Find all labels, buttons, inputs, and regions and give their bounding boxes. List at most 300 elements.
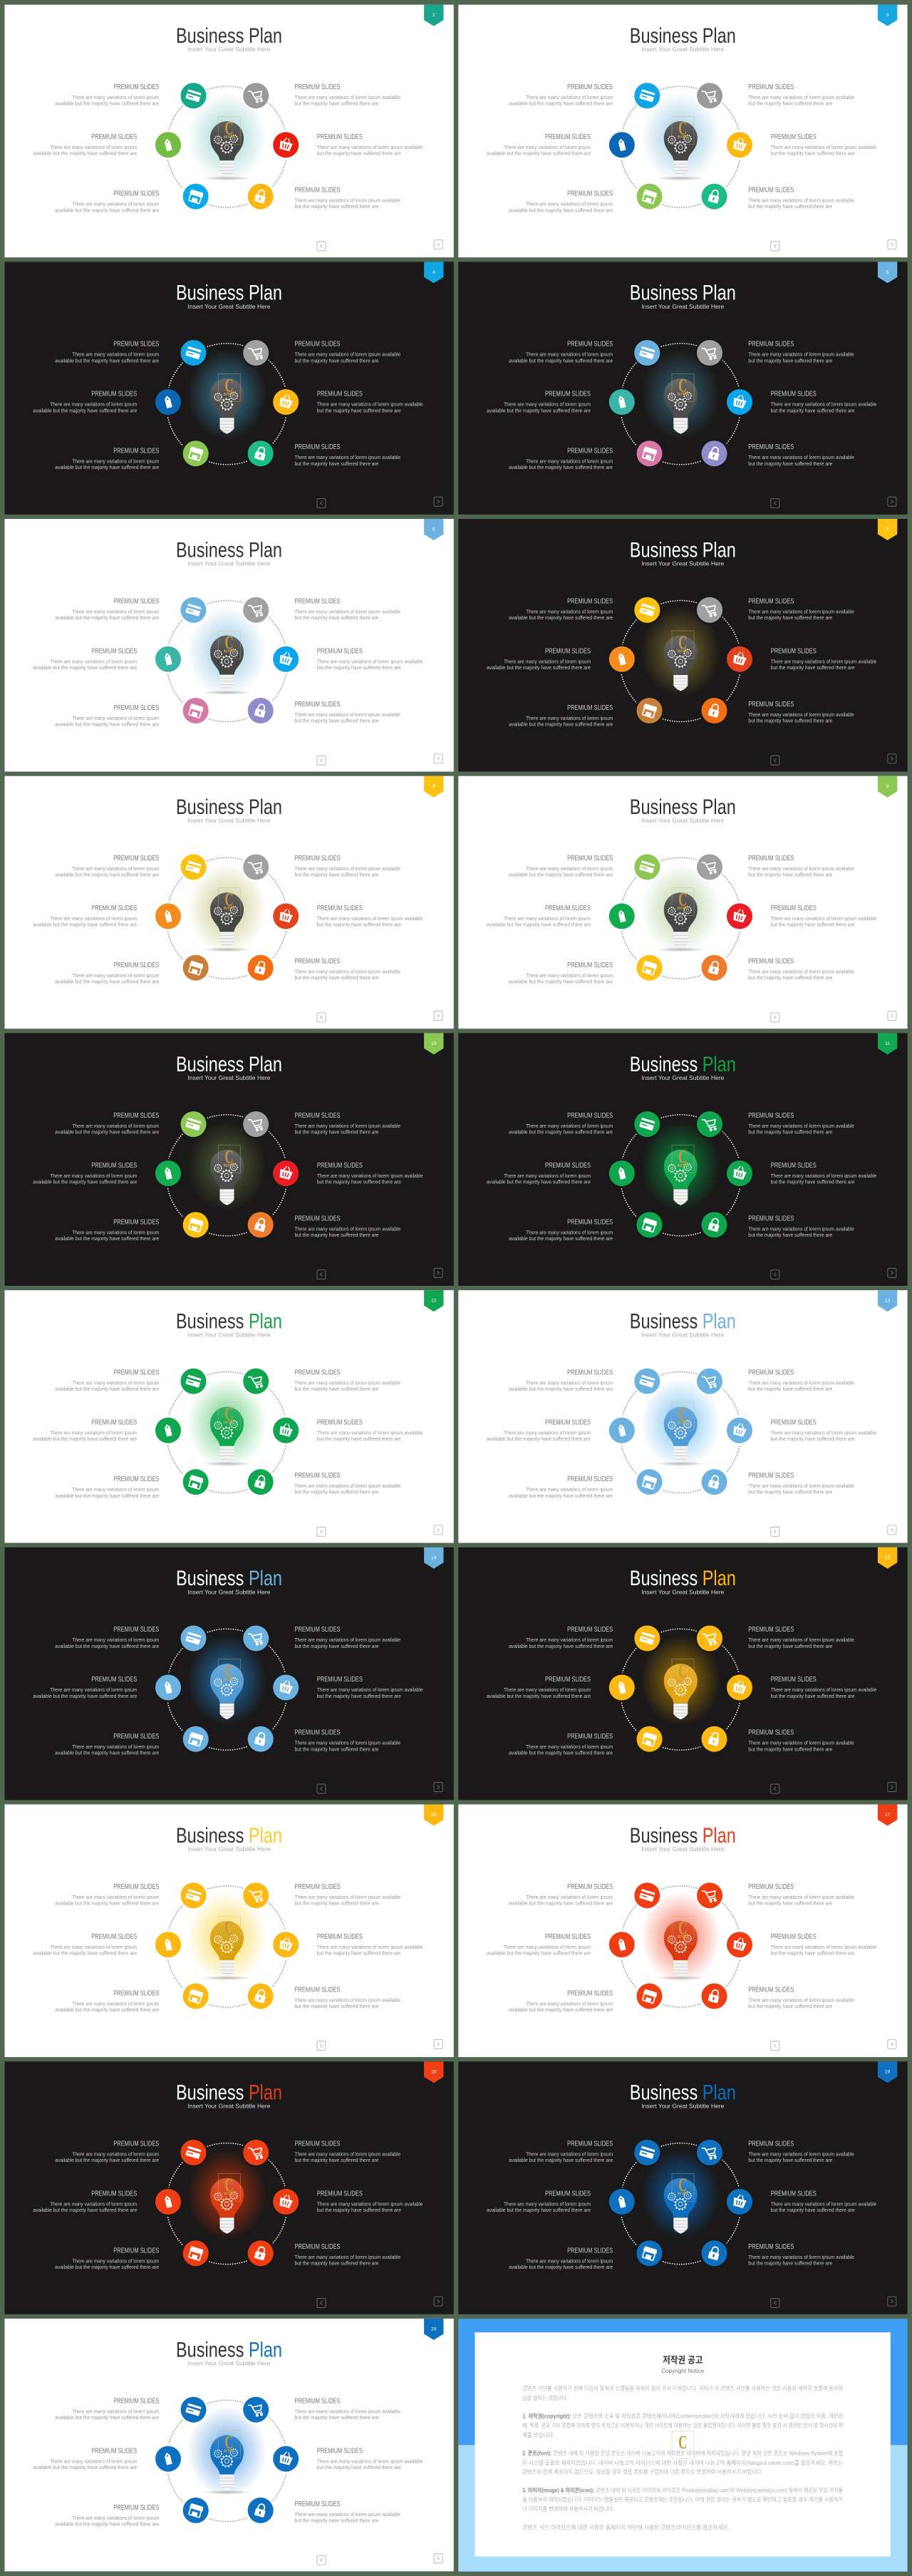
text block: middle left: available but the majority have suffered there are bbox=[33, 1952, 137, 1956]
text block: bottom right: but the majority have suffered there are bbox=[295, 1233, 379, 1238]
icon: lock bbox=[248, 1212, 274, 1237]
subtitle: Insert Your Great Subtitle Here bbox=[641, 2103, 725, 2110]
page tab: 6 bbox=[432, 527, 435, 532]
text block: middle left: There are many variations of lorem ipsum bbox=[50, 145, 137, 150]
text block: middle right bbox=[771, 133, 876, 157]
panel: slide 20 bbox=[4, 2319, 454, 2571]
icon: cart bbox=[243, 1369, 269, 1394]
text block: middle left: PREMIUM SLIDES bbox=[545, 1418, 591, 1426]
title: Business Plan bbox=[630, 1309, 736, 1333]
text block: middle right: but the majority have suffered there are bbox=[317, 408, 401, 413]
text block: bottom right: There are many variations of lorem ipsum available bbox=[295, 713, 400, 718]
icon: basket bbox=[727, 903, 752, 929]
watermark: INTRO bbox=[678, 650, 688, 654]
page tab: 2 bbox=[432, 13, 435, 18]
text block: middle left: PREMIUM SLIDES bbox=[91, 133, 137, 141]
text block: middle left: available but the majority have suffered there are bbox=[487, 152, 591, 157]
text block: bottom left bbox=[509, 190, 613, 213]
text block: top left: There are many variations of lorem ipsum bbox=[72, 609, 159, 614]
text block: bottom right bbox=[295, 700, 400, 724]
text block: bottom right bbox=[295, 2500, 400, 2523]
page tab: 13 bbox=[885, 1299, 891, 1304]
text block: middle right: but the majority have suffered there are bbox=[771, 1694, 855, 1699]
text block: middle right: There are many variations of lorem ipsum available bbox=[771, 917, 876, 922]
text block: bottom right bbox=[748, 1729, 854, 1752]
watermark: C bbox=[678, 118, 687, 139]
icon: store bbox=[637, 2240, 663, 2266]
text block: middle left: There are many variations of lorem ipsum bbox=[504, 1174, 591, 1179]
page tab bbox=[424, 2319, 443, 2340]
text block: top left: available but the majority have suffered there are bbox=[55, 873, 159, 878]
text block: top right: but the majority have suffered there are bbox=[748, 102, 832, 107]
text block: middle right bbox=[317, 904, 423, 928]
page tab: 9 bbox=[886, 784, 889, 789]
panel: slide 12 bbox=[4, 1290, 454, 1543]
icon: lock bbox=[248, 1983, 274, 2009]
text block: bottom right: PREMIUM SLIDES bbox=[748, 1471, 794, 1480]
text block: bottom right: but the majority have suffered there are bbox=[748, 1233, 832, 1238]
text block: middle right: PREMIUM SLIDES bbox=[771, 133, 817, 141]
icon: lock bbox=[701, 2240, 727, 2266]
watermark bbox=[218, 1916, 240, 1944]
watermark: C bbox=[678, 890, 687, 910]
icon: basket bbox=[273, 132, 299, 158]
text block: middle right: but the majority have suffered there are bbox=[771, 1437, 855, 1442]
text block: top left: PREMIUM SLIDES bbox=[113, 1111, 159, 1120]
watermark: C bbox=[224, 632, 234, 653]
text block: middle left bbox=[487, 904, 591, 928]
notice body text: 배, 복제, 공유 기타 방법에 의하여 영리 목적으로 이용하거나 개인 사이트에 이용하는 것은 불법행위입니다. 이러한 불법 행위 발견 시 증언된 민사 및 형사상의 제 bbox=[522, 2422, 843, 2429]
text block: bottom left bbox=[55, 961, 159, 984]
text block: bottom left: There are many variations of lorem ipsum bbox=[526, 1745, 613, 1750]
text block: bottom right bbox=[748, 1214, 854, 1238]
text block: top right: but the majority have suffered there are bbox=[748, 873, 832, 878]
text block: bottom right bbox=[295, 1214, 400, 1238]
text block: bottom left bbox=[55, 446, 159, 470]
text block: middle left bbox=[487, 1418, 591, 1442]
icon: cart bbox=[243, 1625, 269, 1651]
watermark: INTRO bbox=[224, 1935, 234, 1939]
icon: credit card bbox=[181, 597, 207, 623]
text block: middle left bbox=[33, 1418, 137, 1442]
text block: top left: There are many variations of lorem ipsum bbox=[72, 1124, 159, 1129]
dotted ring bbox=[167, 857, 288, 979]
text block: middle right bbox=[317, 2190, 423, 2213]
subtitle: Insert Your Great Subtitle Here bbox=[188, 2103, 271, 2110]
text block: bottom right: There are many variations of lorem ipsum available bbox=[748, 970, 854, 975]
page tab bbox=[424, 1547, 443, 1569]
icon: basket bbox=[727, 1932, 752, 1957]
icon: tag bbox=[155, 1418, 181, 1443]
text block: middle right bbox=[317, 1161, 423, 1185]
text block: top left: There are many variations of lorem ipsum bbox=[72, 353, 159, 358]
text block: middle right: PREMIUM SLIDES bbox=[771, 1161, 817, 1170]
icon: lock bbox=[248, 184, 274, 210]
text block: top left bbox=[55, 2140, 159, 2163]
text block: bottom left: PREMIUM SLIDES bbox=[113, 2246, 159, 2255]
title: Business Plan bbox=[176, 24, 282, 48]
watermark bbox=[672, 2173, 694, 2201]
text block: middle left bbox=[33, 2446, 137, 2471]
text block: middle right: PREMIUM SLIDES bbox=[771, 646, 817, 655]
text block: bottom left: available but the majority have suffered there are bbox=[509, 1237, 613, 1242]
icon: credit card bbox=[634, 1882, 660, 1908]
text block: bottom right: PREMIUM SLIDES bbox=[748, 700, 794, 709]
text block: top right: There are many variations of lorem ipsum available bbox=[748, 1895, 854, 1900]
text block: top left bbox=[509, 1882, 613, 1906]
icon: basket bbox=[727, 1675, 752, 1701]
text block: middle left: available but the majority have suffered there are bbox=[33, 408, 137, 413]
panel: slide 3 bbox=[458, 5, 908, 257]
watermark bbox=[672, 888, 694, 916]
nav: previous bbox=[317, 756, 326, 765]
text block: bottom right: but the majority have suffered there are bbox=[295, 205, 379, 210]
text block: middle right: PREMIUM SLIDES bbox=[317, 646, 363, 655]
icon: lock bbox=[701, 1983, 727, 2009]
text block: top right: There are many variations of lorem ipsum available bbox=[295, 867, 400, 872]
dotted ring bbox=[620, 600, 741, 721]
icon: tag bbox=[609, 132, 635, 158]
text block: bottom left: There are many variations of lorem ipsum bbox=[72, 2516, 159, 2521]
panel: slide 17 bbox=[458, 1805, 908, 2057]
icon: store bbox=[183, 1983, 209, 2009]
title: Business Plan bbox=[176, 1309, 282, 1333]
page tab bbox=[424, 776, 443, 798]
icon: store bbox=[637, 1212, 663, 1237]
text block: top right: PREMIUM SLIDES bbox=[748, 2140, 794, 2148]
text block: top left: available but the majority have suffered there are bbox=[509, 2158, 613, 2163]
text block: middle left: There are many variations of lorem ipsum bbox=[504, 917, 591, 922]
icon: lock bbox=[248, 1726, 274, 1752]
text block: middle left: There are many variations of lorem ipsum bbox=[504, 1945, 591, 1950]
text block: top left: There are many variations of lorem ipsum bbox=[526, 2153, 613, 2158]
title: Business Plan bbox=[630, 1053, 736, 1076]
text block: top left: PREMIUM SLIDES bbox=[113, 1368, 159, 1376]
text block: top left: PREMIUM SLIDES bbox=[113, 1882, 159, 1891]
text block: top left bbox=[509, 1111, 613, 1135]
text block: top right: but the majority have suffered there are bbox=[295, 359, 379, 364]
icon: tag bbox=[609, 1932, 635, 1957]
text block: top right: There are many variations of lorem ipsum available bbox=[748, 1124, 854, 1129]
text block: bottom left bbox=[509, 961, 613, 984]
icon: credit card bbox=[634, 1111, 660, 1137]
text block: middle right: PREMIUM SLIDES bbox=[771, 1932, 817, 1941]
nav: previous bbox=[317, 2041, 326, 2051]
text block: bottom left: PREMIUM SLIDES bbox=[113, 1732, 159, 1741]
page tab: 15 bbox=[885, 1555, 891, 1560]
text block: middle left: There are many variations of lorem ipsum bbox=[50, 1688, 137, 1693]
text block: middle left: available but the majority have suffered there are bbox=[33, 1437, 137, 1442]
text block: middle right: but the majority have suffered there are bbox=[317, 666, 401, 671]
text block: middle right: PREMIUM SLIDES bbox=[317, 390, 363, 398]
watermark: INTRO bbox=[224, 907, 234, 911]
text block: top right: There are many variations of lorem ipsum available bbox=[295, 96, 400, 101]
page tab: 8 bbox=[432, 784, 435, 789]
icon: store bbox=[637, 1726, 663, 1752]
text block: bottom left: There are many variations of lorem ipsum bbox=[72, 202, 159, 207]
nav: previous bbox=[771, 499, 779, 508]
notice body text: 3. 이미지(image) & 아이콘(icon): 콘텐츠 내에 된 사진은 이미지와 아이콘은 Pixabay(pixabay.com)와 Webalys(webalys.com) 등에서 제공된 무료 저작물 bbox=[522, 2486, 843, 2493]
text block: top right: PREMIUM SLIDES bbox=[748, 1111, 794, 1120]
text block: middle right: There are many variations of lorem ipsum available bbox=[771, 1431, 876, 1436]
text block: bottom right: but the majority have suffered there are bbox=[295, 1490, 379, 1495]
text block: top right: but the majority have suffered there are bbox=[748, 2158, 832, 2163]
text block: top left: available but the majority have suffered there are bbox=[509, 873, 613, 878]
text block: middle left: available but the majority have suffered there are bbox=[33, 923, 137, 928]
text block: top left bbox=[55, 1369, 159, 1392]
icon: basket bbox=[727, 389, 752, 415]
title: Business Plan bbox=[176, 538, 282, 562]
text block: bottom right: PREMIUM SLIDES bbox=[295, 443, 341, 451]
watermark: INTRO bbox=[224, 135, 234, 140]
text block: middle right: but the majority have suffered there are bbox=[317, 1694, 401, 1699]
text block: middle left: There are many variations of lorem ipsum bbox=[504, 659, 591, 664]
watermark: C bbox=[224, 1661, 234, 1681]
text block: top left: There are many variations of lorem ipsum bbox=[526, 867, 613, 872]
lightbulb bbox=[641, 1120, 720, 1212]
text block: middle right: but the majority have suffered there are bbox=[317, 2466, 401, 2471]
text block: middle right: PREMIUM SLIDES bbox=[771, 1418, 817, 1426]
title: Business Plan bbox=[176, 2338, 282, 2361]
text block: bottom left: There are many variations of lorem ipsum bbox=[72, 716, 159, 721]
watermark: INTRO bbox=[224, 1164, 234, 1168]
dotted ring bbox=[620, 1115, 741, 1236]
icon: lock bbox=[701, 698, 727, 723]
nav: previous bbox=[771, 1013, 779, 1022]
text block: top left bbox=[55, 2396, 159, 2421]
text block: middle left: There are many variations of lorem ipsum bbox=[504, 2203, 591, 2207]
text block: top left: There are many variations of lorem ipsum bbox=[72, 96, 159, 101]
text block: middle right: There are many variations of lorem ipsum available bbox=[317, 2203, 423, 2207]
nav: next bbox=[434, 2297, 442, 2306]
text block: top right: There are many variations of lorem ipsum available bbox=[295, 2409, 400, 2414]
watermark: C bbox=[678, 376, 687, 396]
text block: middle right: but the majority have suffered there are bbox=[317, 923, 401, 928]
text block: top left bbox=[55, 83, 159, 107]
text block: top right: but the majority have suffered there are bbox=[295, 616, 379, 621]
text block: bottom right: but the majority have suffered there are bbox=[748, 2004, 832, 2009]
text block: middle left: available but the majority have suffered there are bbox=[33, 1180, 137, 1185]
icon: credit card bbox=[181, 2140, 207, 2165]
text block: bottom right: PREMIUM SLIDES bbox=[748, 957, 794, 966]
text block: top right: but the majority have suffered there are bbox=[295, 2158, 379, 2163]
text block: middle left bbox=[487, 390, 591, 413]
notice body text: 1. 저작권(copyright): 모든 콘텐츠의 소유 및 저작권은 콘텐츠제이니어(Contentsmaker)와 저작자에게 있습니다. 사전 승낙 없이 상업적 이용, 개인간 bbox=[522, 2412, 844, 2419]
text block: middle right: There are many variations of lorem ipsum available bbox=[317, 1431, 423, 1436]
text block: top right: PREMIUM SLIDES bbox=[295, 2396, 341, 2405]
text block: top left: There are many variations of lorem ipsum bbox=[526, 353, 613, 358]
text block: middle right: but the majority have suffered there are bbox=[771, 666, 855, 671]
text block: bottom left: available but the majority have suffered there are bbox=[55, 208, 159, 213]
text block: middle right: There are many variations of lorem ipsum available bbox=[317, 403, 423, 408]
icon: lock bbox=[248, 955, 274, 981]
text block: top left: PREMIUM SLIDES bbox=[113, 1625, 159, 1634]
panel: slide 7 bbox=[458, 519, 908, 771]
text block: bottom left: available but the majority have suffered there are bbox=[509, 723, 613, 728]
watermark bbox=[218, 888, 240, 916]
icon: store bbox=[637, 1983, 663, 2009]
text block: bottom left: There are many variations of lorem ipsum bbox=[72, 1745, 159, 1750]
text block: bottom left: available but the majority have suffered there are bbox=[55, 2523, 159, 2528]
text block: top left: There are many variations of lorem ipsum bbox=[526, 1381, 613, 1386]
icon: cart bbox=[697, 83, 722, 108]
watermark: INTRO bbox=[678, 1935, 688, 1939]
text block: top right: PREMIUM SLIDES bbox=[295, 854, 341, 862]
text block: top left bbox=[55, 340, 159, 364]
text block: bottom right: but the majority have suffered there are bbox=[295, 718, 379, 724]
text block: middle left bbox=[33, 390, 137, 413]
text block: bottom left bbox=[509, 1989, 613, 2013]
text block: bottom right: There are many variations of lorem ipsum available bbox=[295, 2255, 400, 2260]
page tab bbox=[424, 1805, 443, 1826]
text block: top left bbox=[55, 1625, 159, 1649]
text block: bottom left: There are many variations of lorem ipsum bbox=[72, 974, 159, 979]
text block: bottom left: PREMIUM SLIDES bbox=[113, 2503, 159, 2512]
text block: middle right: There are many variations of lorem ipsum available bbox=[317, 145, 423, 150]
page tab: 4 bbox=[432, 270, 435, 275]
text block: top right: PREMIUM SLIDES bbox=[748, 597, 794, 605]
lightbulb bbox=[187, 1378, 266, 1469]
text block: bottom left: There are many variations of lorem ipsum bbox=[72, 1488, 159, 1493]
icon: basket bbox=[273, 2189, 299, 2215]
watermark bbox=[218, 1659, 240, 1687]
text block: bottom left: There are many variations of lorem ipsum bbox=[526, 459, 613, 464]
text block: bottom left: There are many variations of lorem ipsum bbox=[526, 1231, 613, 1236]
text block: top left: available but the majority have suffered there are bbox=[55, 1130, 159, 1135]
text block: bottom left: PREMIUM SLIDES bbox=[567, 446, 613, 455]
icon: cart bbox=[697, 1369, 722, 1394]
title: Business Plan bbox=[176, 282, 282, 305]
nav: next bbox=[888, 2039, 896, 2049]
icon: credit card bbox=[181, 340, 207, 366]
icon: store bbox=[183, 955, 209, 981]
text block: middle left: PREMIUM SLIDES bbox=[545, 133, 591, 141]
text block: bottom right: PREMIUM SLIDES bbox=[295, 2242, 341, 2251]
text block: bottom right: PREMIUM SLIDES bbox=[748, 1214, 794, 1222]
text block: bottom right: PREMIUM SLIDES bbox=[748, 2242, 794, 2251]
text block: top right: but the majority have suffered there are bbox=[748, 1130, 832, 1135]
text block: top right: but the majority have suffered there are bbox=[295, 873, 379, 878]
watermark: INTRO bbox=[678, 1678, 688, 1682]
text block: top right: PREMIUM SLIDES bbox=[748, 340, 794, 349]
text block: bottom right: but the majority have suffered there are bbox=[295, 2518, 379, 2523]
text block: top right: but the majority have suffered there are bbox=[748, 1644, 832, 1649]
nav: next bbox=[434, 1011, 442, 1021]
text block: bottom right: There are many variations of lorem ipsum available bbox=[748, 1227, 854, 1232]
text block: bottom right bbox=[748, 2242, 854, 2267]
dotted ring bbox=[167, 1629, 288, 1750]
text block: top left bbox=[509, 2140, 613, 2163]
text block: bottom left bbox=[55, 2503, 159, 2528]
text block: bottom left bbox=[55, 2246, 159, 2270]
text block: middle right bbox=[771, 1675, 876, 1699]
icon: basket bbox=[273, 1418, 299, 1443]
nav: previous bbox=[317, 499, 326, 508]
lightbulb bbox=[641, 349, 720, 441]
text block: middle left: PREMIUM SLIDES bbox=[545, 1161, 591, 1170]
text block: bottom right: but the majority have suffered there are bbox=[295, 2262, 379, 2267]
text block: top left: There are many variations of lorem ipsum bbox=[72, 1638, 159, 1643]
text block: top right bbox=[295, 340, 400, 364]
panel: slide 15 bbox=[458, 1547, 908, 1800]
icon: tag bbox=[155, 1932, 181, 1957]
text block: bottom left: available but the majority have suffered there are bbox=[509, 2265, 613, 2270]
page tab: 17 bbox=[885, 1813, 891, 1818]
watermark: INTRO bbox=[224, 1678, 234, 1682]
nav: next bbox=[888, 1783, 896, 1792]
text block: top right bbox=[295, 2140, 400, 2163]
dotted ring bbox=[620, 2143, 741, 2265]
text block: middle right: There are many variations of lorem ipsum available bbox=[317, 1945, 423, 1950]
text block: top right: but the majority have suffered there are bbox=[295, 1130, 379, 1135]
text block: bottom left: available but the majority have suffered there are bbox=[55, 2008, 159, 2013]
text block: bottom right: PREMIUM SLIDES bbox=[295, 700, 341, 709]
text block: bottom left: available but the majority have suffered there are bbox=[55, 2265, 159, 2270]
subtitle: Insert Your Great Subtitle Here bbox=[188, 1074, 271, 1081]
notice body text bbox=[522, 2385, 844, 2531]
text block: top left bbox=[55, 597, 159, 621]
watermark: C bbox=[224, 1918, 234, 1938]
dotted ring bbox=[167, 2143, 288, 2265]
text block: middle left bbox=[487, 1675, 591, 1699]
subtitle: Insert Your Great Subtitle Here bbox=[641, 303, 725, 310]
text block: top left: PREMIUM SLIDES bbox=[567, 854, 613, 862]
icon: lock bbox=[248, 1469, 274, 1495]
text block: top right bbox=[748, 2140, 854, 2163]
text block: bottom left: PREMIUM SLIDES bbox=[567, 704, 613, 712]
icon: cart bbox=[243, 83, 269, 108]
title: Business Plan bbox=[630, 1567, 736, 1590]
nav: previous bbox=[771, 2041, 779, 2051]
text block: middle left: There are many variations of lorem ipsum bbox=[50, 403, 137, 408]
watermark bbox=[218, 117, 240, 145]
text block: top right bbox=[748, 597, 854, 621]
text block: bottom left bbox=[55, 1217, 159, 1242]
text block: middle left: PREMIUM SLIDES bbox=[545, 1932, 591, 1941]
text block: middle left: There are many variations of lorem ipsum bbox=[504, 145, 591, 150]
text block: bottom left: available but the majority have suffered there are bbox=[509, 208, 613, 213]
nav: previous bbox=[317, 2555, 326, 2565]
watermark bbox=[218, 631, 240, 659]
text block: top right bbox=[748, 1369, 854, 1392]
text block: bottom right bbox=[295, 1471, 400, 1495]
text block: top left: There are many variations of lorem ipsum bbox=[72, 867, 159, 872]
text block: bottom left: PREMIUM SLIDES bbox=[567, 190, 613, 198]
text block: bottom right: There are many variations of lorem ipsum available bbox=[748, 1998, 854, 2003]
text block: top right: There are many variations of lorem ipsum available bbox=[748, 1638, 854, 1643]
text block: middle right: PREMIUM SLIDES bbox=[317, 2190, 363, 2198]
subtitle: Insert Your Great Subtitle Here bbox=[188, 560, 271, 567]
text block: bottom left: There are many variations of lorem ipsum bbox=[526, 974, 613, 979]
lightbulb bbox=[641, 1892, 720, 1983]
icon: store bbox=[183, 184, 209, 210]
text block: bottom right: PREMIUM SLIDES bbox=[748, 1729, 794, 1737]
watermark: C bbox=[678, 1403, 687, 1424]
text block: top right bbox=[295, 1369, 400, 1392]
text block: bottom right: but the majority have suffered there are bbox=[748, 1747, 832, 1752]
text block: top right: There are many variations of lorem ipsum available bbox=[295, 1124, 400, 1129]
nav: previous bbox=[317, 1784, 326, 1793]
icon: lock bbox=[248, 441, 274, 466]
icon: cart bbox=[243, 1111, 269, 1137]
notice body text: 을 이용하여 제작되었습니다. 이미지는 템플릿만 제공되고 콘텐츠에는 포함됩니다. 이에 관한 권리는 귀하가 별도로 확인하고 필요할 경우 여기를 사용하거 bbox=[522, 2496, 843, 2503]
icon: credit card bbox=[634, 83, 660, 108]
text block: top right bbox=[748, 1625, 854, 1649]
text block: top right bbox=[295, 2396, 400, 2421]
text block: middle left: There are many variations of lorem ipsum bbox=[50, 1945, 137, 1950]
text block: bottom right: PREMIUM SLIDES bbox=[748, 443, 794, 451]
title: Business Plan bbox=[630, 1824, 736, 1848]
